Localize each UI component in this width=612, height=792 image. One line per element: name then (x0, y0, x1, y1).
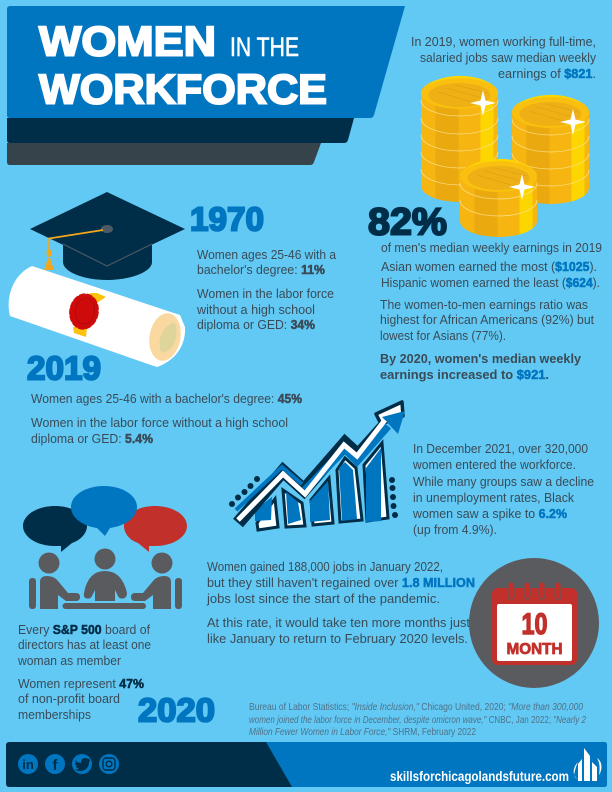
text: S&P 500 boards: of non-profit board (18, 692, 120, 706)
text: 1970 stats: Women in the labor force (197, 287, 334, 301)
text: sources: Bureau of Labor Statistics; "Inside Inclusion," Chicago United, 2020; "More than 300,000 (249, 702, 583, 713)
text: women gained jobs: jobs lost since the start of the pandemic. (206, 592, 440, 606)
icon: rising bar chart with arrow (229, 402, 405, 530)
arrow (238, 425, 385, 523)
title text: WORKFORCE (39, 66, 327, 112)
speech bubble blue (71, 486, 137, 536)
text: women gained jobs (206, 560, 475, 646)
text: S&P 500 boards: directors has at least one (18, 638, 151, 652)
text: 2019 median weekly earnings: salaried jobs saw median weekly (420, 51, 597, 65)
text: 2019 stats: diploma or GED: 5.4% (31, 432, 153, 446)
text: 2019 median weekly earnings: earnings of $821. (498, 67, 596, 81)
text: earnings comparison: Hispanic women earned the least ($624). (381, 276, 600, 290)
text: December 2021: women entered the workforce. (412, 458, 576, 472)
text: earnings comparison: lowest for Asians (77%). (380, 329, 506, 343)
text: earnings comparison: highest for African Americans (92%) but (380, 313, 595, 327)
text: earnings comparison (380, 241, 602, 382)
sparkles (470, 90, 586, 200)
icon: board meeting with speech bubbles (23, 486, 187, 609)
text: 2019 stats: Women ages 25-46 with a bachelor's degree: 45% (31, 392, 302, 406)
text: S&P 500 boards: memberships (18, 708, 91, 722)
text: earnings comparison: of men's median weekly earnings in 2019 (381, 241, 602, 255)
website url: skillsforchicagolandsfuture.com (390, 768, 569, 784)
social icons: f (52, 757, 58, 774)
text: 1970 stats (196, 248, 336, 332)
social icons (18, 754, 119, 774)
title text (39, 18, 327, 112)
stat: 82%: 82% (368, 202, 447, 244)
text: sources: women joined the labor force in December, despite omicron wave," CNBC, Jan 2022; "Nearly 2 (249, 715, 586, 726)
text: 2019 stats (31, 392, 302, 446)
icon: 10 month calendar: 10 (522, 608, 548, 641)
text: earnings comparison: The women-to-men earnings ratio was (380, 298, 588, 312)
social icons: in (22, 757, 34, 772)
text: 1970 stats: bachelor's degree: 11% (197, 263, 325, 277)
text: earnings comparison: earnings increased to $921. (380, 368, 549, 382)
bars (257, 443, 388, 530)
speech bubble red (124, 506, 187, 552)
people (29, 548, 182, 609)
title text: IN THE (230, 32, 299, 62)
footer bar (6, 742, 607, 787)
heading: 2019: 2019 (27, 350, 101, 386)
text: earnings comparison: Asian women earned the most ($1025). (381, 260, 597, 274)
icon: 10 month calendar (469, 558, 599, 688)
text: December 2021: women saw a spike to 6.2% (412, 507, 567, 521)
title text: WOMEN (39, 18, 216, 64)
text: S&P 500 boards: woman as member (17, 654, 121, 668)
coin stack front (460, 159, 537, 237)
text: earnings comparison: By 2020, women's median weekly (380, 352, 581, 366)
icon: 10 month calendar: MONTH (506, 641, 562, 658)
text: S&P 500 boards (17, 623, 151, 722)
title banner (7, 6, 405, 165)
text: December 2021 (412, 442, 594, 537)
text: December 2021: (up from 4.9%). (413, 523, 497, 537)
text: women gained jobs: like January to return to February 2020 levels. (207, 632, 468, 646)
icon: skyline logo (574, 748, 601, 781)
icon: graduation cap (30, 192, 185, 280)
text: 2019 stats: Women in the labor force without a high school (31, 416, 288, 430)
text: S&P 500 boards: Every S&P 500 board of (18, 623, 151, 637)
text: S&P 500 boards: Women represent 47% (18, 677, 144, 691)
wax seal (68, 293, 100, 330)
heading: 2020: 2020 (138, 692, 215, 728)
dots (229, 476, 398, 518)
text: 1970 stats: diploma or GED: 34% (197, 318, 315, 332)
icon: diploma scroll (9, 266, 185, 367)
text: women gained jobs: but they still haven't regained over 1.8 MILLION (207, 576, 475, 590)
coin stack left (421, 76, 498, 202)
text: December 2021: While many groups saw a decline (413, 475, 594, 489)
heading: 1970: 1970 (190, 200, 264, 238)
text: women gained jobs: Women gained 188,000 jobs in January 2022, (207, 560, 443, 574)
text: December 2021: in unemployment rates, Black (413, 491, 575, 505)
text: sources (249, 702, 586, 738)
text: 2019 median weekly earnings (411, 35, 597, 81)
text: December 2021: In December 2021, over 320,000 (413, 442, 588, 456)
text: 2019 median weekly earnings: In 2019, women working full-time, (411, 35, 596, 49)
speech bubble navy (23, 506, 87, 552)
icon: stacks of gold coins (421, 76, 589, 237)
text: 1970 stats: Women ages 25-46 with a (197, 248, 336, 262)
coin stack right (512, 95, 589, 204)
text: 1970 stats: without a high school (196, 303, 315, 317)
text: women gained jobs: At this rate, it would take ten more months just (207, 616, 471, 630)
text: sources: Million Fewer Women in Labor Force," SHRM, February 2022 (249, 727, 476, 738)
